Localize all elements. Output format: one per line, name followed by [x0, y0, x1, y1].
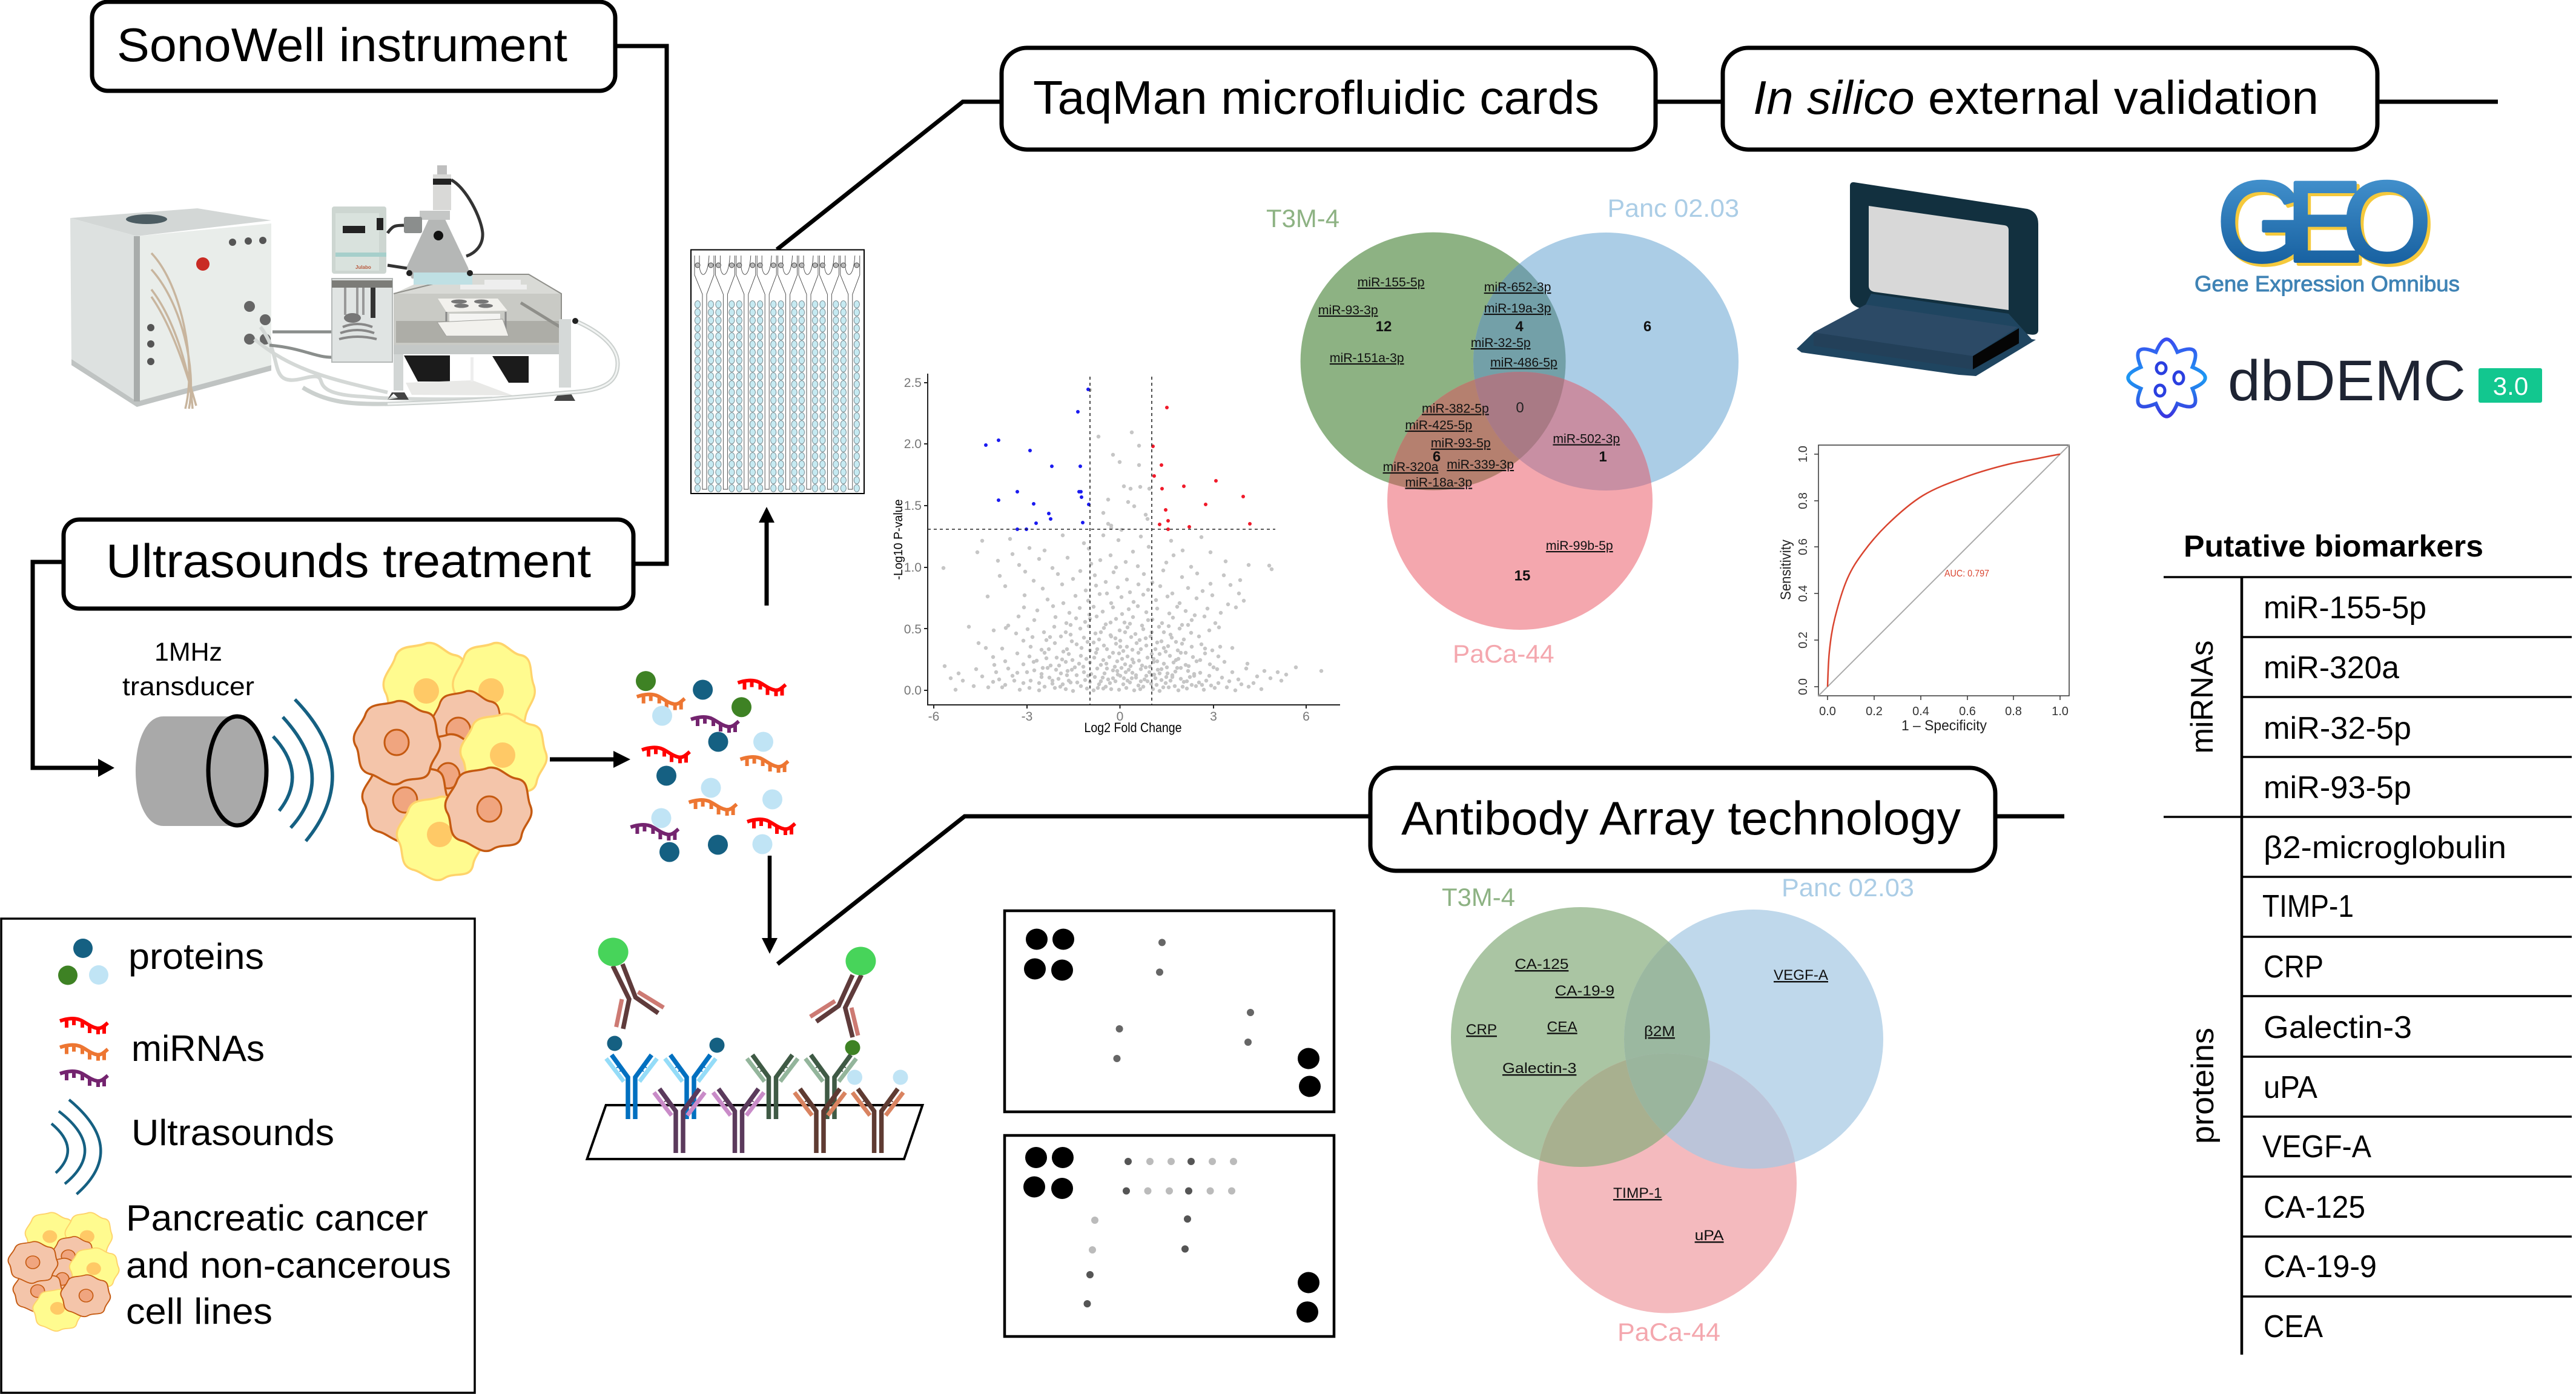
chart: volcano plot: 1.0 — [904, 561, 922, 575]
chart: miRNA Venn diagram: 0 — [1516, 400, 1524, 416]
chart: volcano plot: 0.5 — [904, 623, 922, 636]
chart: miRNA Venn diagram: miR-652-3p — [1484, 280, 1551, 294]
significant downregulated points — [986, 389, 1089, 529]
icon: cell lines cluster — [354, 643, 547, 880]
chart: protein Venn diagram: PaCa-44 — [1617, 1318, 1720, 1346]
table: putative biomarkers: VEGF-A — [2262, 1129, 2371, 1164]
chart: protein Venn diagram: Galectin-3 — [1502, 1060, 1576, 1077]
logo: Gene Expression Omnibus: GEO — [2217, 158, 2426, 285]
image: antibody array membrane 2 — [1005, 1135, 1334, 1336]
chart: miRNA Venn diagram — [1266, 194, 1739, 668]
chart: ROC curve: 0.2 — [1797, 632, 1810, 649]
icon: transducer cylinder — [136, 716, 266, 826]
table: putative biomarkers: TIMP-1 — [2262, 889, 2354, 924]
chart: ROC curve: 0.2 — [1866, 705, 1883, 718]
heading: SonoWell instrument: SonoWell instrument — [117, 18, 567, 71]
legend: proteins: proteins — [128, 936, 264, 977]
arrow: molecules to antibody array — [762, 856, 778, 954]
chart: ROC curve: Sensitivity — [1778, 540, 1794, 600]
chart: volcano plot: -Log10 P-value — [892, 499, 905, 580]
table: putative biomarkers: CA-125 — [2264, 1190, 2365, 1225]
chart: miRNA Venn diagram: miR-425-5p — [1405, 418, 1472, 432]
table: putative biomarkers: miR-155-5p — [2264, 590, 2426, 626]
table: putative biomarkers: miR-320a — [2264, 650, 2399, 685]
chart: ROC curve: 0.4 — [1797, 585, 1810, 602]
chart: protein Venn diagram: Panc 02.03 — [1782, 873, 1914, 902]
image: SonoWell instrument photo — [70, 165, 618, 409]
chart: miRNA Venn diagram: miR-320a — [1383, 460, 1439, 474]
logo: Gene Expression Omnibus: GEO — [2220, 161, 2429, 288]
chart: miRNA Venn diagram: 6 — [1643, 319, 1651, 335]
chart: miRNA Venn diagram: miR-502-3p — [1553, 432, 1620, 446]
chart: miRNA Venn diagram: miR-93-5p — [1431, 437, 1491, 451]
chart: protein Venn diagram: β2M — [1644, 1023, 1675, 1040]
heading: Antibody Array technology: Antibody Array technology — [1401, 791, 1961, 845]
chart: ROC curve: 1.0 — [2052, 705, 2069, 718]
logo: Gene Expression Omnibus — [2195, 158, 2460, 296]
chart: volcano plot — [892, 374, 1340, 735]
chart: volcano plot: 0.0 — [904, 684, 922, 698]
label: 1MHz transducer — [122, 638, 254, 701]
chart: miRNA Venn diagram: miR-18a-3p — [1405, 476, 1472, 489]
legend: ultrasounds — [51, 1100, 334, 1194]
chart: ROC curve: 0.8 — [1797, 492, 1810, 509]
heading: In silico external validation — [1723, 48, 2377, 150]
chart: volcano plot: 3 — [1210, 710, 1217, 724]
table: putative biomarkers: miR-32-5p — [2264, 711, 2411, 746]
sample holder — [438, 299, 507, 312]
icon: antibody array schematic — [587, 937, 922, 1159]
logo: dbDEMC 3.0 — [2128, 339, 2542, 417]
chart: ROC curve: 1 – Specificity — [1901, 718, 1987, 734]
legend: pancreatic cancer and non-cancerous cell lines: cell lines — [126, 1291, 272, 1332]
comb and tower — [406, 219, 471, 279]
heading: TaqMan microfluidic cards — [1002, 48, 1656, 150]
table: putative biomarkers: Putative biomarkers — [2184, 529, 2483, 563]
legend: pancreatic cancer and non-cancerous cell lines — [8, 1198, 451, 1332]
legend: ultrasounds: Ultrasounds — [131, 1112, 334, 1153]
arrow: Ultrasounds treatment to transducer — [33, 562, 114, 777]
table: putative biomarkers: miR-93-5p — [2264, 770, 2411, 805]
legend: pancreatic cancer and non-cancerous cell lines: and non-cancerous — [126, 1245, 451, 1286]
chart: miRNA Venn diagram: 12 — [1376, 319, 1392, 335]
circulator bath — [332, 206, 386, 274]
chart: miRNA Venn diagram: 4 — [1515, 319, 1524, 335]
chart: miRNA Venn diagram: miR-382-5p — [1422, 402, 1489, 415]
chart: ROC curve: 0.8 — [2005, 705, 2022, 718]
chart: miRNA Venn diagram: miR-339-3p — [1447, 458, 1514, 472]
logo: Gene Expression Omnibus: Gene Expression Omnibus — [2195, 271, 2460, 296]
chart: volcano plot: -3 — [1022, 710, 1032, 724]
legend: pancreatic cancer and non-cancerous cell lines: Pancreatic cancer — [126, 1198, 428, 1238]
chart: protein Venn diagram: CA-19-9 — [1555, 983, 1614, 999]
heading: SonoWell instrument — [92, 2, 615, 91]
legend: proteins — [58, 936, 264, 985]
chart: volcano plot: 2.5 — [904, 376, 922, 390]
heading: Antibody Array technology — [1370, 768, 1995, 871]
arrow: cells to released molecules — [550, 751, 630, 768]
connector: microfluidic card to TaqMan heading — [777, 102, 1003, 249]
table: putative biomarkers: uPA — [2264, 1070, 2317, 1105]
chart: volcano plot: -6 — [928, 710, 939, 724]
label: 1MHz transducer: transducer — [122, 672, 254, 701]
heading: Ultrasounds treatment — [64, 520, 633, 609]
chart: protein Venn diagram — [1442, 873, 1914, 1346]
chart: volcano plot: 6 — [1303, 710, 1310, 724]
icon: ultrasound waves — [273, 699, 332, 841]
chart: protein Venn diagram: VEGF-A — [1774, 967, 1828, 983]
grey points — [943, 390, 1321, 691]
significant upregulated points — [1153, 408, 1250, 529]
chart: miRNA Venn diagram: miR-151a-3p — [1330, 351, 1404, 365]
chart: miRNA Venn diagram: PaCa-44 — [1453, 639, 1554, 668]
glass enclosure — [394, 274, 561, 345]
table: putative biomarkers: miRNAs — [2185, 641, 2220, 753]
table: putative biomarkers: β2-microglobulin — [2264, 830, 2506, 865]
chart: miRNA Venn diagram: Panc 02.03 — [1607, 194, 1739, 222]
chart: miRNA Venn diagram: miR-155-5p — [1358, 276, 1424, 289]
connector: antibody array to heading and onward — [778, 816, 2064, 964]
label: 1MHz transducer: 1MHz — [154, 638, 222, 667]
chart: ROC curve: 0.0 — [1819, 705, 1836, 718]
legend: miRNAs — [60, 1019, 265, 1087]
chart: miRNA Venn diagram: miR-32-5p — [1471, 336, 1531, 350]
connector: TaqMan to In silico and onward — [1656, 99, 2498, 104]
chart: protein Venn diagram: CEA — [1547, 1019, 1577, 1035]
chart: ROC curve: 0.4 — [1912, 705, 1929, 718]
chart: protein Venn diagram: CA-125 — [1515, 956, 1568, 973]
chart: miRNA Venn diagram: 1 — [1599, 449, 1607, 465]
logo: dbDEMC 3.0: dbDEMC — [2228, 349, 2466, 413]
table: putative biomarkers: CA-19-9 — [2264, 1249, 2377, 1284]
chart: miRNA Venn diagram: 6 — [1433, 449, 1441, 465]
table: putative biomarkers: Galectin-3 — [2264, 1010, 2412, 1045]
image: antibody array membrane 1 — [1005, 911, 1334, 1112]
chart: protein Venn diagram: CRP — [1466, 1022, 1497, 1038]
logo: dbDEMC 3.0: 3.0 — [2493, 372, 2528, 400]
chart: protein Venn diagram: uPA — [1695, 1227, 1724, 1244]
frame and boxes — [394, 345, 562, 354]
connector: SonoWell to Ultrasounds treatment — [615, 46, 667, 564]
heading: TaqMan microfluidic cards: TaqMan microfluidic cards — [1033, 71, 1599, 124]
table: putative biomarkers — [2164, 529, 2572, 1355]
chart: miRNA Venn diagram: miR-99b-5p — [1546, 539, 1613, 553]
heading: Ultrasounds treatment: Ultrasounds treatment — [106, 534, 591, 587]
chart: miRNA Venn diagram: T3M-4 — [1266, 204, 1339, 233]
table: putative biomarkers: CRP — [2264, 950, 2323, 985]
table: putative biomarkers: CEA — [2264, 1309, 2323, 1344]
chart: volcano plot: 1.5 — [904, 499, 922, 513]
chart: miRNA Venn diagram: miR-19a-3p — [1484, 302, 1551, 315]
chart: ROC curve: 0.0 — [1797, 678, 1810, 695]
image: SonoWell instrument photo: Julabo — [355, 265, 371, 270]
chart: miRNA Venn diagram: 15 — [1514, 568, 1530, 584]
icon: released proteins and miRNAs — [630, 671, 795, 862]
right tube — [303, 321, 618, 404]
chart: ROC curve: AUC: 0.797 — [1944, 569, 1989, 579]
chart: volcano plot: 2.0 — [904, 437, 922, 451]
chart: ROC curve: 1.0 — [1797, 446, 1810, 463]
chart: protein Venn diagram: TIMP-1 — [1613, 1185, 1662, 1201]
heading: In silico external validation: In silico external validation — [1753, 71, 2319, 124]
chart: ROC curve — [1778, 445, 2069, 734]
chart: protein Venn diagram: T3M-4 — [1442, 883, 1515, 911]
chart: volcano plot: Log2 Fold Change — [1084, 720, 1182, 735]
chart: volcano plot: 0 — [1117, 710, 1123, 724]
chart: miRNA Venn diagram: miR-486-5p — [1490, 356, 1557, 369]
image: TaqMan microfluidic card — [691, 249, 864, 494]
arrow: up to microfluidic card — [759, 507, 774, 606]
table: putative biomarkers: proteins — [2185, 1028, 2221, 1144]
chart: miRNA Venn diagram: miR-93-3p — [1318, 303, 1378, 317]
chart: ROC curve: 0.6 — [1797, 538, 1810, 555]
chart: ROC curve: 0.6 — [1959, 705, 1976, 718]
icon: laptop — [1797, 182, 2038, 376]
legend: miRNAs: miRNAs — [131, 1028, 265, 1069]
panel: legend — [1, 919, 475, 1393]
tubes — [254, 327, 492, 399]
